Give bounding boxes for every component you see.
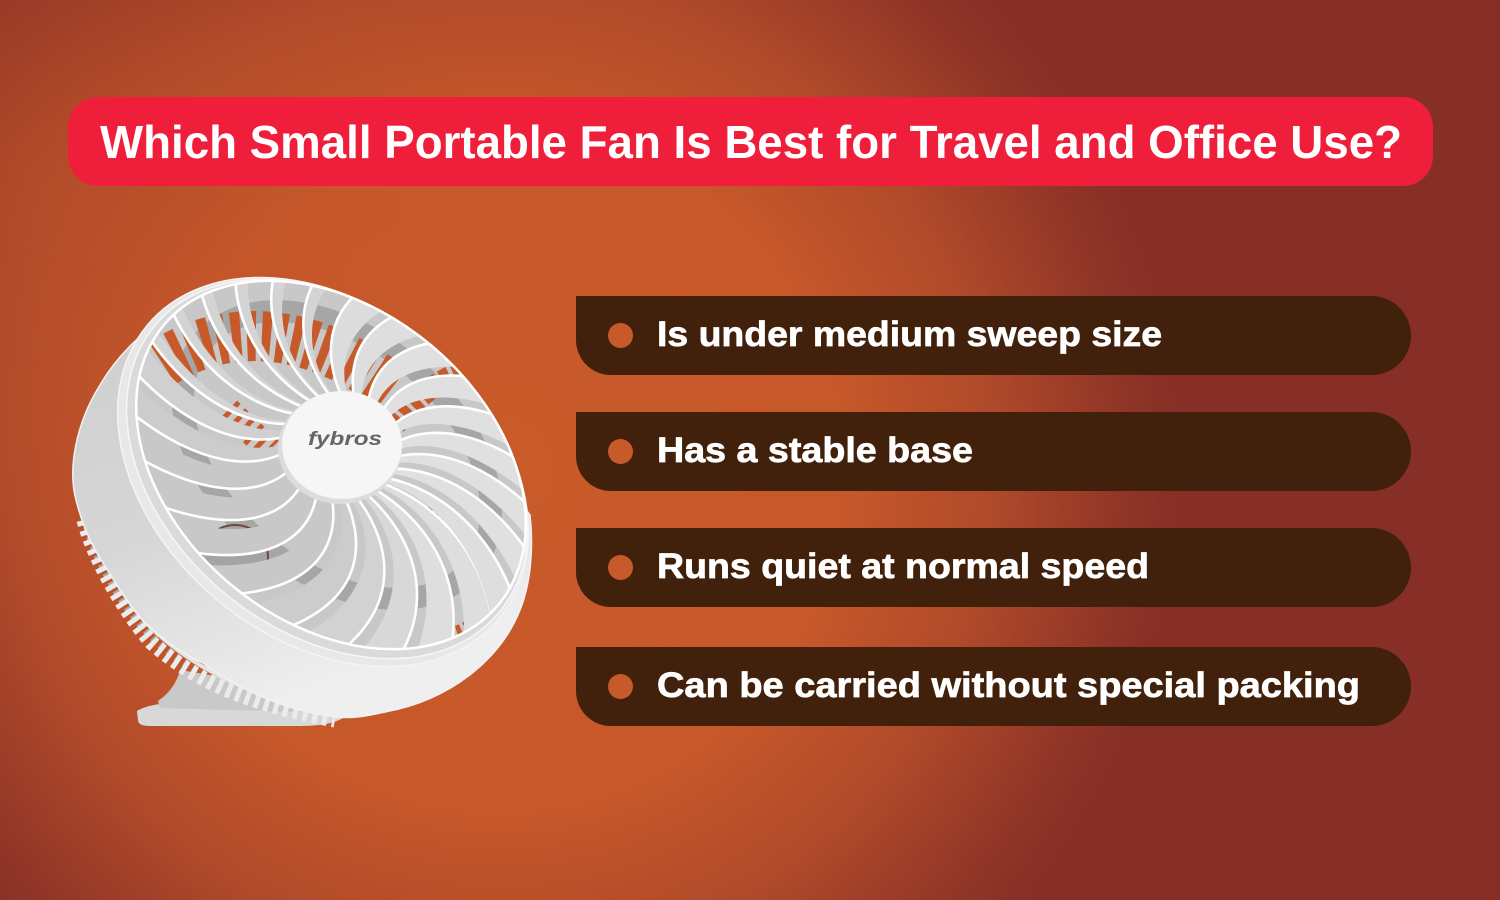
fan ribs [138,282,524,648]
brand logo: fybros [308,429,382,450]
title: Which Small Portable Fan Is Best for Travel and Office Use? [100,116,1402,168]
fan body [73,282,532,718]
rim [41,198,605,746]
bullet 1 [608,323,633,348]
list item 4 [576,647,1411,726]
bullet 3 [608,555,633,580]
hub [278,391,402,504]
motor [202,524,269,566]
cooling fins [84,520,335,720]
fan stand [137,670,343,726]
text 4: Can be carried without special packing [657,666,1360,705]
list item 2 [576,412,1411,491]
text 2: Has a stable base [657,431,973,470]
inner wall [172,300,502,610]
list item 3 [576,528,1411,607]
list item 1 [576,296,1411,375]
grille edge [64,205,598,725]
grille interior [138,282,524,648]
rear openings [150,336,392,388]
fan illustration [72,276,532,728]
title banner [68,97,1433,186]
text 1: Is under medium sweep size [657,315,1162,354]
text 3: Runs quiet at normal speed [657,547,1149,586]
bullet 4 [608,674,633,699]
bullet 2 [608,439,633,464]
